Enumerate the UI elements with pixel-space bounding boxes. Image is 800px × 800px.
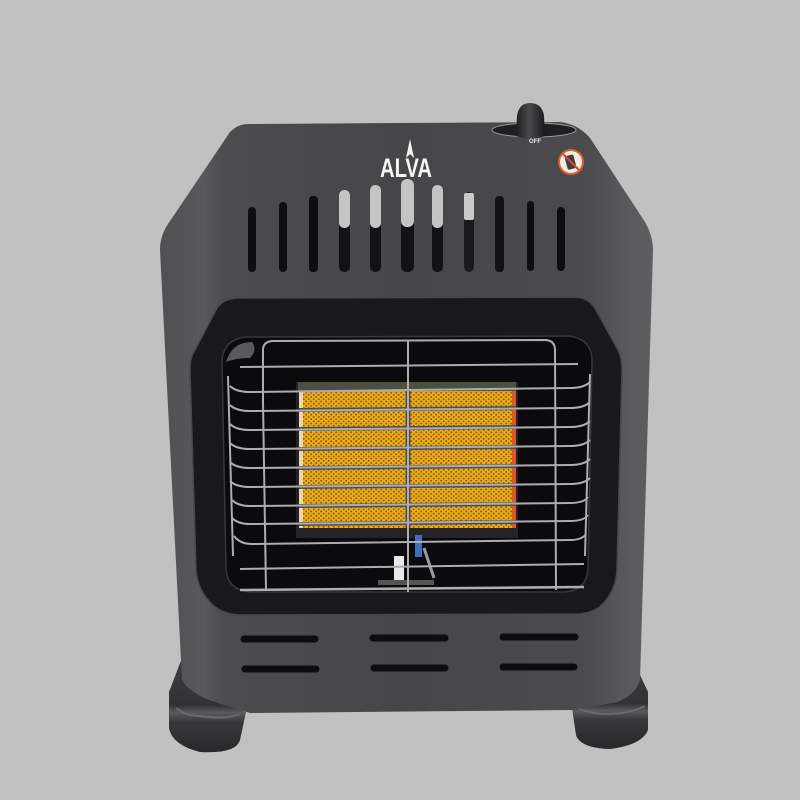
control knob [492,103,576,145]
heater body [160,122,653,713]
top vent slots [248,179,565,272]
chrome wire guard [228,340,590,592]
window recess [222,336,592,592]
off label: OFF [529,139,541,145]
igniter and pilot flame [378,535,434,585]
lower vent slots [244,637,575,669]
right foot [572,658,648,749]
ceramic burner panel [299,391,516,528]
corner highlights [226,342,255,362]
black front frame [190,297,622,615]
logo: ALVA [380,153,432,183]
warning sticker [559,150,583,174]
wire guard shadow [299,391,516,528]
ceramic burner surround [296,382,518,538]
logo [380,139,432,183]
left foot [169,658,246,752]
